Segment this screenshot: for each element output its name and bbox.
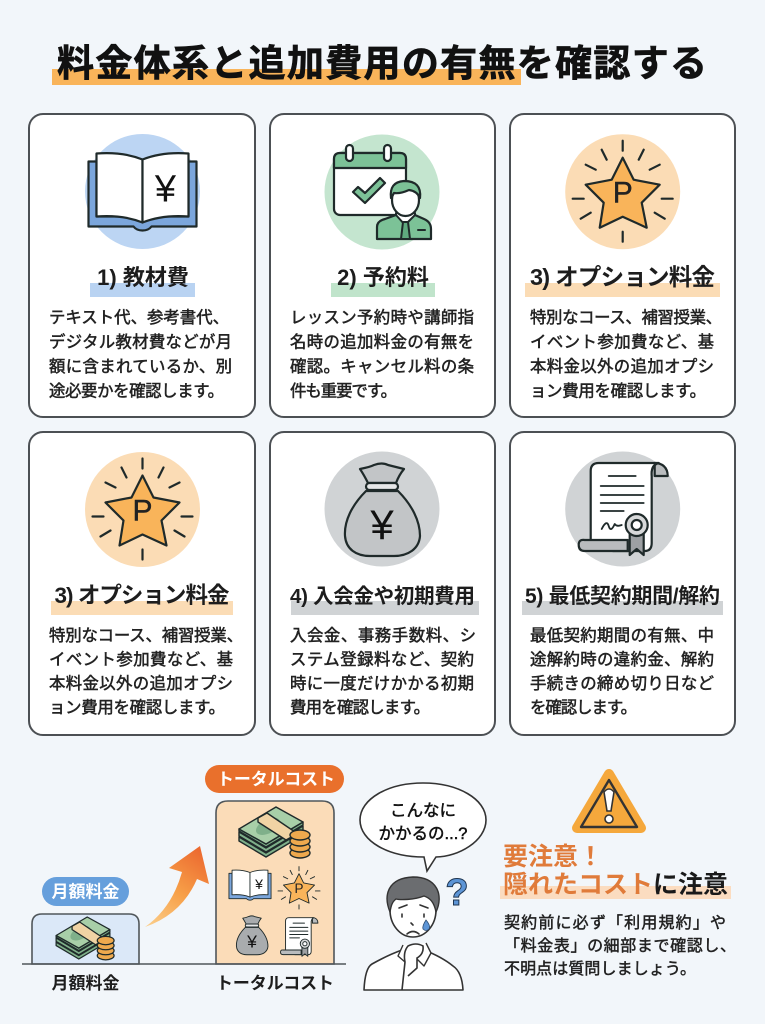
- text block: 件も重要です。: [290, 382, 397, 400]
- warning text: 不明点は質問しましょう。: [504, 960, 696, 978]
- icon: small bag: [236, 916, 268, 955]
- icon: small star: P: [295, 881, 304, 896]
- label: monthly fee: 月額料金: [52, 973, 120, 993]
- icon: small book: [229, 870, 271, 900]
- heading: 3) オプション料金: [530, 264, 716, 290]
- heading: 5) 最低契約期間/解約: [525, 585, 720, 608]
- icon: small bag: ¥: [246, 932, 257, 952]
- warning heading: 要注意！: [503, 843, 603, 871]
- icon: money large: [239, 807, 310, 858]
- speech bubble: [360, 783, 486, 871]
- text block: ステム登録料など、契約: [290, 651, 474, 669]
- heading: 3) オプション料金: [54, 583, 230, 608]
- face: [399, 905, 428, 934]
- text block: 手続きの締め切り日など: [530, 675, 714, 693]
- panel: 3 オプション料金: [510, 114, 735, 417]
- warning heading: 隠れたコスト: [503, 871, 653, 899]
- icon: small book: ¥: [254, 876, 263, 892]
- speech bubble: こんなに: [390, 801, 456, 820]
- label: total cost: トータルコスト: [216, 974, 334, 993]
- icon: calendar and person: [324, 134, 440, 250]
- icon: warning: [577, 774, 641, 828]
- panel: 5 最低契約期間/解約: [510, 432, 735, 735]
- title: 料金体系と追加費用の有無を確認する: [57, 43, 707, 84]
- icon: star: [85, 452, 200, 567]
- text block: 途解約時の違約金、解約: [530, 651, 714, 669]
- question mark: ?: [445, 872, 469, 914]
- text block: レッスン予約時や講師指: [290, 309, 474, 327]
- text block: 最低契約期間の有無、中: [530, 627, 714, 645]
- speech bubble: かかるの...?: [379, 825, 467, 843]
- heading: 1) 教材費: [97, 265, 189, 290]
- text block: イベント参加費など、基: [530, 334, 714, 352]
- box: monthly fee: [32, 914, 139, 964]
- warning heading: に注意: [653, 871, 728, 899]
- text block: ョン費用を確認します。: [530, 382, 706, 400]
- text block: ョン費用を確認します。: [49, 699, 225, 717]
- text block: 時に一度だけかかる初期: [290, 675, 474, 693]
- box: total cost: [216, 801, 334, 964]
- baseline: [22, 963, 346, 965]
- heading: 2) 予約料: [337, 265, 429, 290]
- arrow: [145, 846, 209, 927]
- collar: [398, 943, 431, 968]
- text block: 特別なコース、補習授業、: [530, 309, 722, 327]
- icon: money bag: ¥: [369, 501, 394, 548]
- text block: 名時の追加料金の有無を: [290, 334, 474, 352]
- icon: star: [565, 134, 680, 249]
- text block: デジタル教材費などが月: [49, 332, 232, 352]
- icon: money small: [56, 917, 114, 960]
- heading: [90, 265, 195, 297]
- sweat: [423, 920, 430, 930]
- text block: [49, 309, 232, 400]
- body: [364, 950, 463, 990]
- text block: 確認。キャンセル料の条: [290, 358, 474, 376]
- text block: を確認します。: [530, 699, 637, 717]
- text block: [530, 309, 722, 400]
- text block: 入会金、事務手数料、シ: [290, 627, 476, 645]
- pill: monthly fee: 月額料金: [52, 882, 120, 902]
- icon: contract scroll: [565, 452, 680, 566]
- pill: total cost: トータルコスト: [217, 770, 335, 789]
- text block: イベント参加費など、基: [49, 651, 233, 669]
- icon: small star: [278, 867, 320, 909]
- hair: [387, 877, 439, 912]
- panel: 3 オプション料金 (row 2): [29, 432, 255, 735]
- text block: [290, 627, 476, 717]
- text block: [290, 309, 474, 400]
- icon: small scroll: [281, 918, 318, 956]
- warning heading: [500, 843, 731, 899]
- text block: テキスト代、参考書代、: [49, 309, 229, 327]
- warning text: [504, 914, 736, 978]
- person worried: [364, 872, 469, 990]
- head: [390, 883, 436, 937]
- text block: 費用を確認します。: [290, 699, 430, 717]
- text block: [530, 627, 714, 717]
- panel: 2 予約料: [270, 114, 495, 417]
- warning text: 契約前に必ず「利用規約」や: [504, 914, 726, 932]
- warning text: 「料金表」の細部まで確認し、: [504, 937, 736, 955]
- text block: [49, 627, 243, 717]
- pill: monthly fee: [42, 877, 129, 906]
- panel: 4 入会金や初期費用: [270, 432, 495, 735]
- icon: star: P: [613, 177, 633, 210]
- text block: 本料金以外の追加オプシ: [49, 675, 233, 693]
- text block: 本料金以外の追加オプシ: [530, 358, 714, 376]
- icon: book: ¥: [154, 168, 177, 210]
- heading: [331, 265, 435, 297]
- hand: [402, 944, 423, 990]
- icon: money bag: [324, 452, 440, 566]
- icon: star: P: [132, 494, 153, 528]
- text block: 途必要かを確認します。: [49, 382, 224, 400]
- text block: 特別なコース、補習授業、: [49, 627, 243, 645]
- heading: 4) 入会金や初期費用: [290, 585, 475, 608]
- pill: total cost: [205, 765, 344, 793]
- chart: monthly fee vs total cost: [22, 765, 346, 993]
- icon: book: [85, 134, 200, 249]
- panel: 1 教材費: [29, 114, 255, 417]
- text block: 額に含まれているか、別: [49, 358, 232, 376]
